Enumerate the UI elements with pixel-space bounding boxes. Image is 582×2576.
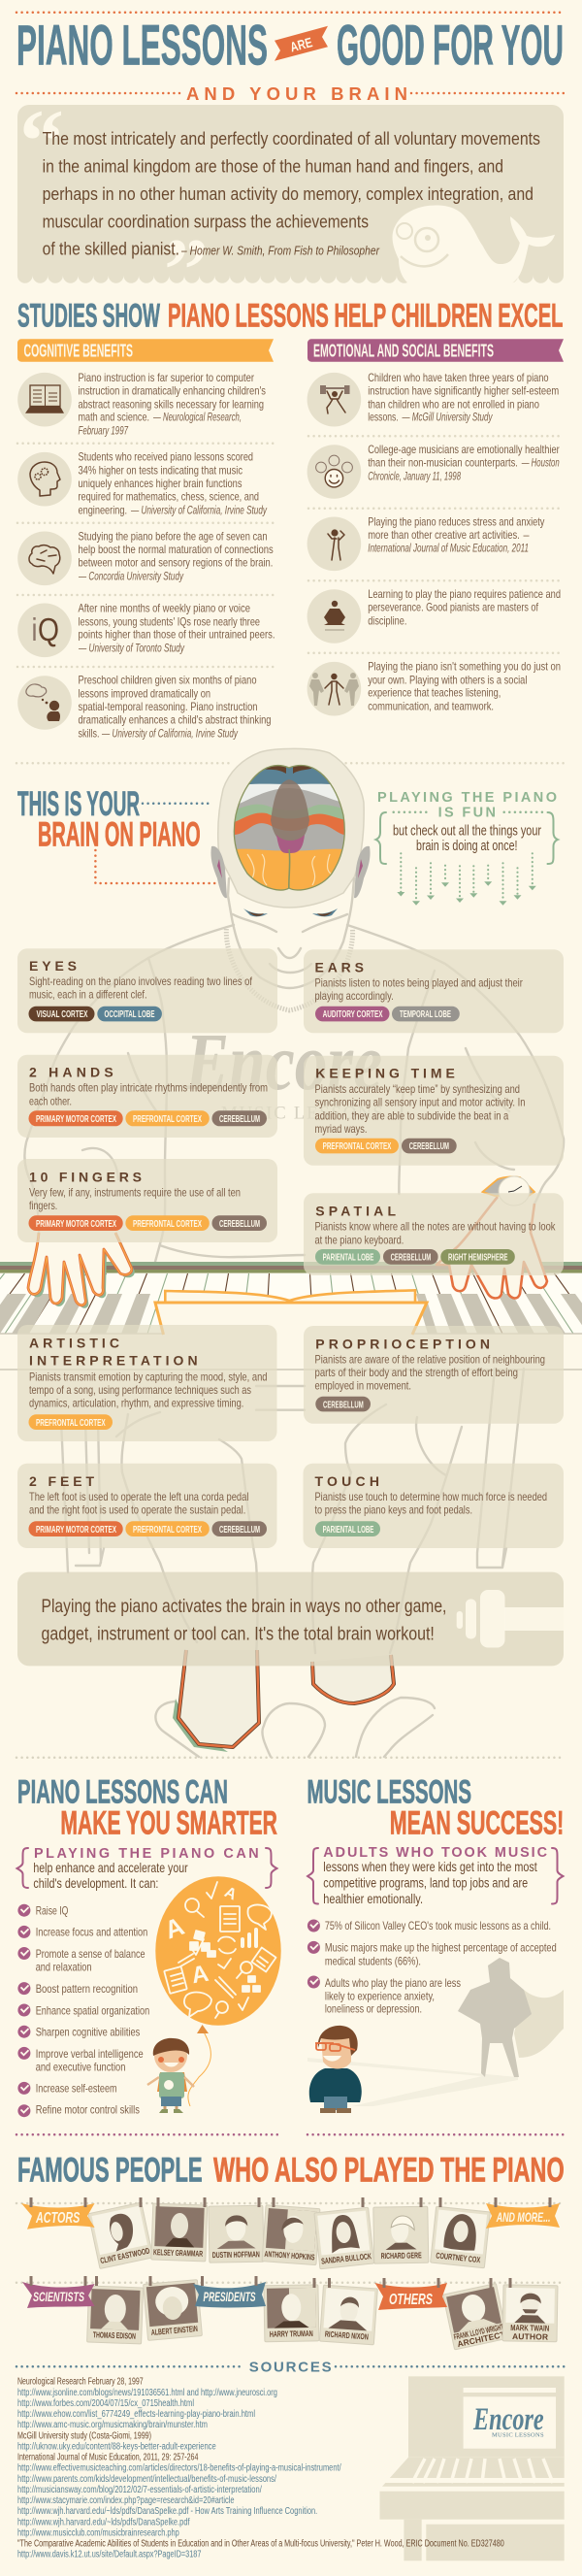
title: PIANO LESSONS [16, 15, 268, 78]
banner: presidents: PRESIDENTS [204, 2289, 256, 2304]
polaroid: richard nixon: RICHARD NIXON [325, 2328, 369, 2341]
text: cognitive 5: skills. [78, 726, 99, 740]
heading: studies show: STUDIES SHOW [17, 298, 161, 335]
polaroid: thomas edison: THOMAS EDISON [93, 2329, 136, 2341]
text: cognitive 4: — University of Toronto Study [78, 644, 185, 655]
logo: encore music lessons: MUSIC LESSONS [492, 2432, 544, 2439]
icon: laptop book [17, 373, 72, 427]
tag: prefrontal cortex [125, 1521, 210, 1536]
tag: temporal lobe: TEMPORAL LOBE [400, 1008, 451, 1020]
callout: playing the piano is fun [376, 790, 558, 906]
text: sources list: http://www.parents.com/kids/development/intellectual/benefits-of-music-lessons/ [17, 2474, 276, 2485]
icon: iQ: Q [38, 611, 59, 647]
quote marks: “ [19, 91, 64, 190]
panel: total brain workout: gadget, instrument or tool can. It's the total brain workout! [41, 1623, 435, 1644]
illustration: sheet music book [155, 1290, 427, 1335]
icon: head with gears [17, 452, 72, 507]
text: cognitive 5: spatial-temporal reasoning. Piano instruction [78, 700, 258, 713]
title: ARE [288, 34, 314, 55]
text: cognitive 2 [78, 450, 268, 516]
heading: music lessons mean success: MUSIC LESSONS [307, 1774, 471, 1811]
text: sources list: International Journal of Music Education, 2011, 29: 257-264 [17, 2453, 199, 2463]
heading: piano lessons can make you smarter [17, 1774, 277, 1841]
tag: auditory cortex [315, 1007, 390, 1021]
illustration: balloon with icons: A [189, 1961, 210, 1989]
quote text: of the skilled pianist. [43, 239, 179, 259]
panel: proprioception: employed in movement. [314, 1379, 411, 1393]
text: cognitive 2: required for mathematics, chess, science, and [78, 490, 259, 504]
text: cognitive 1: Piano instruction is far superior to computer [78, 371, 254, 384]
illustration: superhero shadow [307, 1958, 564, 2106]
checklist: piano lessons: Improve verbal intelligence [36, 2047, 144, 2061]
checklist: music lessons: medical students (66%). [325, 1954, 421, 1967]
panel: 2 hands: 2 HANDS [29, 1064, 113, 1079]
panel: 2 feet: The left foot is used to operate the left una corda pedal [29, 1490, 248, 1503]
panel: keeping time: KEEPING TIME [315, 1066, 455, 1081]
text: cognitive 5: — University of California, Irvine Study [101, 728, 239, 740]
icon: iQ [17, 604, 72, 657]
panel: eyes: Sight-reading on the piano involves reading two lines of [29, 974, 253, 988]
panel: artistic interpretation: ARTISTIC [29, 1336, 119, 1351]
tag: auditory cortex: AUDITORY CORTEX [323, 1008, 383, 1020]
heading: famous people [17, 2152, 565, 2190]
panel: 10 fingers: Very few, if any, instruments require the use of all ten [29, 1185, 241, 1199]
polaroid: courtney cox: COURTNEY COX [436, 2251, 481, 2264]
illustration: man with glasses [308, 2026, 362, 2113]
tag: cerebellum [402, 1139, 457, 1153]
text: emotional 5: experience that teaches listening, [368, 686, 501, 700]
text: sources list: http://www.stacymarie.com/index.php?page=research&id=20#article [17, 2495, 235, 2506]
text: cognitive 5: lessons improved dramatically on [78, 686, 210, 700]
text: sources list: http://www.jsonline.com/blogs/news/191036561.html and http://www.jneurosci.org [17, 2388, 277, 2398]
tag: cerebellum: CEREBELLUM [323, 1399, 364, 1410]
text: sources list: http://www.forbes.com/2004/07/15/cx_0715health.html [17, 2398, 194, 2409]
panel: spatial [304, 1193, 564, 1275]
tag: right hemisphere: RIGHT HEMISPHERE [448, 1252, 508, 1264]
panel: quote [17, 91, 564, 319]
icon: thinking child [17, 676, 72, 730]
panel: 2 feet: 2 FEET [29, 1473, 94, 1489]
tag: prefrontal cortex: PREFRONTAL CORTEX [133, 1113, 202, 1125]
polaroid: kelsey grammar: KELSEY GRAMMAR [153, 2247, 203, 2259]
panel: artistic interpretation: Pianists transmit emotion by capturing the mood, style, and [29, 1370, 268, 1383]
panel: keeping time: addition, they are able to subdivide the beat in a [314, 1108, 509, 1122]
polaroid: frank lloyd wright: ARCHITECT [456, 2329, 506, 2349]
text: emotional 2 [368, 443, 560, 483]
checklist: music lessons: Adults who play the piano are less [325, 1976, 461, 1990]
text: emotional 2: — Houston [521, 458, 560, 470]
heading: sources: SOURCES [249, 2359, 332, 2375]
banner: scientists: SCIENTISTS [33, 2289, 84, 2304]
tag: prefrontal cortex: PREFRONTAL CORTEX [323, 1140, 391, 1152]
icon: dumbbell [457, 1590, 564, 1648]
tag: occipital lobe [97, 1007, 162, 1021]
tag: cerebellum: CEREBELLUM [219, 1524, 260, 1536]
quote marks: ” [164, 220, 209, 319]
tag: pariental lobe: PARIENTAL LOBE [323, 1524, 373, 1536]
callout: playing the piano can [17, 1846, 277, 1891]
text: cognitive 4: After nine months of weekly piano or voice [78, 602, 250, 615]
banner: actors [21, 2203, 95, 2229]
text: cognitive 5: dramatically enhances a child's abstract thinking [78, 713, 272, 727]
panel: touch: to press the piano keys and foot pedals. [314, 1503, 472, 1517]
checklist: music lessons: loneliness or depression. [325, 2002, 422, 2016]
panel: keeping time: synchronizing all sensory input and motor activity. In [314, 1096, 526, 1109]
text: cognitive 1: math and science. [78, 411, 149, 424]
quote text: in the animal kingdom are those of the human hand and fingers, and [43, 156, 503, 177]
tag: visual cortex [29, 1007, 95, 1021]
illustration: pianist body outline [24, 925, 564, 1653]
callout: adults who took music: healthier emotionally. [323, 1891, 423, 1906]
heading: this is your brain on piano [17, 785, 217, 883]
text: cognitive 2: engineering. [78, 503, 127, 516]
heading: piano lessons can make you smarter: MAKE YOU SMARTER [60, 1804, 277, 1841]
text: emotional 5 [368, 660, 561, 712]
polaroid: frank lloyd wright: FRANK LLOYD WRIGHT [453, 2322, 504, 2342]
polaroid: clint eastwood: CLINT EASTWOOD [99, 2246, 150, 2265]
tag: cerebellum: CEREBELLUM [219, 1113, 260, 1125]
eyes [243, 908, 338, 916]
quote text: muscular coordination surpass the achievements [43, 211, 369, 231]
polaroid: richard gere: RICHARD GERE [381, 2250, 422, 2261]
panel: eyes: EYES [29, 958, 77, 974]
banner: others: OTHERS [389, 2292, 433, 2308]
panel: keeping time: Pianists accurately “keep time” by synthesizing and [314, 1082, 520, 1096]
polaroid: sandra bullock: SANDRA BULLOCK [321, 2251, 372, 2266]
text: emotional 2: Chronicle, January 11, 1998 [368, 472, 461, 483]
text: cognitive 1: February 1997 [78, 425, 128, 437]
icon: brain [17, 532, 72, 585]
polaroid: harry truman [264, 2285, 319, 2342]
tag: cerebellum [211, 1215, 267, 1231]
checklist: music lessons [307, 1919, 557, 2016]
text: emotional 1: — McGill University Study [402, 413, 493, 424]
polaroid: harry truman: HARRY TRUMAN [270, 2328, 313, 2339]
tag: pariental lobe [315, 1521, 380, 1536]
text: emotional 2: than their non-musician counterparts. [368, 456, 518, 470]
polaroid: mark twain [502, 2285, 558, 2342]
panel: spatial: at the piano keyboard. [314, 1233, 404, 1246]
heading: famous people: FAMOUS PEOPLE [17, 2152, 203, 2190]
banner: scientists [22, 2282, 95, 2308]
watermark: encore logo: MUSIC LESSONS [221, 1104, 383, 1124]
checklist: piano lessons: Boost pattern recognition [36, 1982, 138, 1996]
panel: touch: TOUCH [314, 1473, 379, 1489]
text: cognitive 1: abstract reasoning skills necessary for learning [78, 397, 264, 411]
illustration: boy with backpack [147, 2038, 194, 2113]
polaroid: thomas edison [87, 2286, 144, 2344]
text: cognitive 5: Preschool children given six months of piano [78, 674, 257, 687]
text: sources list: http://www.effectivemusicteaching.com/articles/directors/18-benefits-of-playing-a-musical-instrument/ [17, 2463, 341, 2474]
tag: primary motor cortex [29, 1215, 123, 1231]
panel: 10 fingers: 10 FINGERS [29, 1169, 142, 1184]
illustration: right hand and watch [436, 1176, 547, 1299]
checklist: piano lessons: Promote a sense of balance [36, 1947, 146, 1961]
illustration: shoes and pedals [155, 1650, 435, 1757]
panel: proprioception [304, 1326, 564, 1424]
polaroid: frank lloyd wright [443, 2284, 507, 2350]
logo: encore music lessons: Encore [472, 2402, 544, 2437]
callout: playing the piano can: help enhance and accelerate your [33, 1860, 188, 1875]
icon: weightlifter [307, 373, 361, 427]
callout: adults who took music: ADULTS WHO TOOK MUSIC [323, 1845, 547, 1861]
tag: prefrontal cortex [29, 1414, 113, 1430]
checklist: piano lessons: Raise IQ [36, 1904, 68, 1918]
panel: 2 hands: Both hands often play intricate rhythms independently from [29, 1081, 268, 1095]
panel: keeping time [304, 1056, 564, 1166]
icon: smileys [307, 445, 361, 499]
banner: actors: ACTORS [35, 2210, 81, 2227]
text: sources list: http://uknow.uky.edu/content/88-keys-better-adult-experience [17, 2442, 216, 2452]
text: cognitive 2: 34% higher on tests indicating that music [78, 463, 242, 477]
text: sources list [17, 2377, 504, 2560]
tag: cerebellum [383, 1249, 438, 1265]
polaroid: albert einstein [144, 2280, 202, 2340]
text: cognitive 1 [78, 371, 266, 437]
illustration: piano with encore logo [380, 2376, 565, 2560]
polaroid: dustin hoffman: DUSTIN HOFFMAN [212, 2249, 260, 2260]
ears [210, 846, 371, 898]
text: sources list: http://www.wjh.harvard.edu/~lds/pdfs/DanaSpelke.pdf [17, 2517, 190, 2527]
polaroid: sandra bullock [314, 2207, 374, 2269]
quote text [43, 128, 540, 259]
callout: playing the piano can: child's development. It can: [33, 1875, 158, 1891]
text: emotional 3 [368, 514, 544, 555]
panel: touch [303, 1464, 564, 1548]
polaroid: kelsey grammar [151, 2203, 208, 2262]
banner: others [374, 2283, 447, 2310]
text: emotional 4: discipline. [368, 613, 406, 627]
callout: playing the piano is fun: PLAYING THE PIANO [377, 790, 557, 806]
panel: 2 hands: each other. [29, 1094, 72, 1107]
panel: 2 feet [17, 1464, 277, 1548]
panel: artistic interpretation: dynamics, articulation, rhythm, and expressive timing. [29, 1397, 243, 1410]
panel: spatial: SPATIAL [315, 1204, 396, 1219]
panel: eyes [17, 948, 277, 1033]
panel: ears: playing accordingly. [314, 989, 394, 1003]
tag: prefrontal cortex: PREFRONTAL CORTEX [133, 1524, 202, 1536]
polaroid: mark twain: AUTHOR [512, 2331, 548, 2342]
tag: right hemisphere [440, 1249, 515, 1265]
panel: artistic interpretation [17, 1325, 277, 1441]
panel: artistic interpretation: INTERPRETATION [29, 1352, 198, 1368]
panel: eyes: music, each in a different clef. [29, 988, 147, 1002]
text: sources list: http://www.ehow.com/list_6774249_effects-learning-play-piano-brain.html [17, 2409, 255, 2420]
tag: cerebellum [315, 1397, 371, 1411]
text: sources list: http://www.wjh.harvard.edu/~lds/pdfs/DanaSpelke.pdf - How Arts Training Influence Cognition. [17, 2506, 317, 2517]
text: cognitive 3: help boost the normal maturation of connections [78, 543, 274, 556]
banner: and more: AND MORE... [496, 2209, 551, 2225]
text: emotional 1: than children who are not enrolled in piano [368, 397, 539, 411]
text: cognitive 4: points higher than those of their untrained peers. [78, 628, 275, 642]
banner: presidents [193, 2282, 266, 2308]
tag: occipital lobe: OCCIPITAL LOBE [105, 1008, 155, 1020]
polaroid: richard nixon [319, 2285, 377, 2345]
tag: prefrontal cortex: PREFRONTAL CORTEX [133, 1218, 202, 1230]
arrows [397, 853, 536, 906]
illustration: keyboard [0, 1262, 582, 1370]
illustration: left hand [28, 1233, 135, 1308]
icon: stretching man [307, 516, 361, 571]
banner: and more [486, 2203, 560, 2229]
text: emotional 5: communication, and teamwork. [368, 699, 494, 712]
panel: artistic interpretation: tempo of a song, using performance techniques such as [29, 1383, 251, 1397]
text: sources list: http://www.musicclub.com/musicbrainresearch.php [17, 2527, 179, 2539]
tag: primary motor cortex [29, 1110, 123, 1126]
text: cognitive 2: Students who received piano lessons scored [78, 450, 253, 464]
text: cognitive 1: instruction in dramatically enhancing children's [78, 384, 266, 398]
tag: cerebellum: CEREBELLUM [391, 1252, 431, 1264]
illustration: balloon with icons: A [222, 1884, 240, 1904]
text: emotional 1: lessons. [368, 411, 399, 424]
heading: this is your brain on piano: THIS IS YOUR [17, 785, 140, 823]
text: emotional 5: your own. Playing with others is a social [368, 673, 527, 686]
checklist: piano lessons: Sharpen cognitive abilities [36, 2025, 140, 2038]
tag: prefrontal cortex [125, 1215, 210, 1231]
tag: primary motor cortex: PRIMARY MOTOR CORTEX [36, 1218, 116, 1230]
polaroid: anthony hopkins: ANTHONY HOPKINS [264, 2249, 315, 2262]
illustration: balloon with icons [155, 1876, 281, 2106]
tag: temporal lobe [392, 1007, 460, 1021]
panel: total brain workout [17, 1572, 564, 1666]
text: cognitive 2: uniquely enhances higher brain functions [78, 477, 242, 490]
text: sources list: http://musiciansway.com/blog/2012/02/7-essentials-of-artistic-interpretation/ [17, 2485, 262, 2495]
checklist: music lessons: likely to experience anxiety, [325, 1989, 435, 2002]
whale [393, 205, 555, 283]
callout: playing the piano can: PLAYING THE PIANO CAN [34, 1846, 259, 1862]
tag: cerebellum [211, 1521, 267, 1536]
panel: 10 fingers: fingers. [29, 1199, 57, 1212]
tag: pariental lobe [315, 1249, 380, 1265]
banner: cognitive benefits [17, 339, 274, 362]
heading: music lessons mean success [307, 1774, 564, 1841]
polaroid: clint eastwood [88, 2202, 153, 2268]
tag: primary motor cortex: PRIMARY MOTOR CORTEX [36, 1113, 116, 1125]
checklist: piano lessons: and relaxation [36, 1961, 91, 1974]
callout: playing the piano is fun: IS FUN [438, 805, 496, 820]
text: cognitive 4: lessons, young students' IQs rose nearly three [78, 614, 260, 628]
panel: proprioception: PROPRIOCEPTION [315, 1336, 490, 1351]
tag: primary motor cortex [29, 1521, 123, 1536]
text: sources list: McGill University study (Costa-Giomi, 1999) [17, 2430, 151, 2441]
text: cognitive 3: between motor and sensory regions of the brain. [78, 556, 273, 570]
text: emotional 3: more than other creative art activities. [368, 528, 520, 542]
polaroid: richard gere [373, 2206, 429, 2263]
panel: 2 hands [17, 1055, 277, 1138]
panel: ears: Pianists listen to notes being played and adjust their [314, 975, 523, 989]
tag: primary motor cortex: PRIMARY MOTOR CORTEX [36, 1524, 116, 1536]
panel: keeping time: myriad ways. [314, 1122, 367, 1136]
polaroid: courtney cox [431, 2206, 490, 2268]
checklist: piano lessons: Increase self-esteem [36, 2082, 117, 2096]
panel: 2 feet: and the right foot is used to operate the sustain pedal. [29, 1503, 245, 1517]
text: sources list: http://www.davis.k12.ut.us/site/Default.aspx?PageID=3187 [17, 2550, 202, 2560]
text: cognitive 3: — Concordia University Study [78, 571, 184, 582]
checklist: piano lessons: Increase focus and attention [36, 1926, 147, 1939]
tag: cerebellum [211, 1110, 267, 1126]
quote text: – Homer W. Smith, From Fish to Philosopher [180, 244, 380, 258]
tag: prefrontal cortex [315, 1139, 399, 1153]
tag: cerebellum: CEREBELLUM [219, 1218, 260, 1230]
tag: pariental lobe: PARIENTAL LOBE [323, 1252, 373, 1264]
heading: this is your brain on piano: BRAIN ON PIANO [38, 816, 201, 854]
polaroid: anthony hopkins [262, 2205, 320, 2265]
heading: piano lessons can make you smarter: PIANO LESSONS CAN [17, 1774, 228, 1811]
polaroid: albert einstein: ALBERT EINSTEIN [150, 2324, 198, 2337]
text: sources list: http://www.amc-music.org/musicmaking/brain/munster.htm [17, 2420, 208, 2430]
checklist: piano lessons: Enhance spatial organization [36, 2003, 149, 2017]
icon: iQ: i [31, 611, 37, 647]
checklist: piano lessons: and executive function [36, 2061, 125, 2074]
panel: ears [304, 949, 564, 1033]
panel: proprioception: parts of their body and the strength of effort being [314, 1366, 518, 1379]
quote marks [19, 91, 209, 319]
text: cognitive 5 [78, 674, 272, 740]
tag: prefrontal cortex [125, 1110, 210, 1126]
text: cognitive 1: — Neurological Research, [152, 413, 242, 424]
watermark: encore logo: Encore [184, 1017, 382, 1107]
polaroid: mark twain: MARK TWAIN [510, 2323, 549, 2333]
text: cognitive 2: — University of California, Irvine Study [130, 505, 268, 516]
text: cognitive 4 [78, 602, 275, 655]
text: emotional 1 [368, 371, 559, 424]
subtitle: AND YOUR BRAIN [186, 83, 407, 104]
checklist: piano lessons: Refine motor control skills [36, 2102, 140, 2116]
callout: adults who took music [307, 1845, 563, 1906]
checklist: piano lessons [17, 1904, 149, 2117]
tag: prefrontal cortex: PREFRONTAL CORTEX [36, 1417, 106, 1429]
text: cognitive 3: Studying the piano before the age of seven can [78, 529, 268, 543]
illustration: brain map [233, 765, 345, 891]
panel: total brain workout: Playing the piano activates the brain in ways no other game, [41, 1596, 446, 1617]
tag: cerebellum: CEREBELLUM [409, 1140, 449, 1152]
icon: meditating figure [307, 589, 361, 644]
panel: ears: EARS [314, 959, 364, 974]
illustration: head and hair [210, 748, 371, 1010]
text: emotional 3: — [524, 528, 530, 542]
callout: playing the piano is fun: brain is doing at once! [416, 839, 518, 854]
banner: cognitive benefits: COGNITIVE BENEFITS [23, 341, 133, 361]
callout: adults who took music: competitive programs, land top jobs and are [323, 1875, 528, 1891]
icon: group of people [307, 662, 361, 716]
text: emotional 4 [368, 587, 561, 627]
tag: visual cortex: VISUAL CORTEX [37, 1008, 87, 1020]
illustration: balloon with icons: A [161, 1911, 188, 1944]
polaroid: dustin hoffman [209, 2205, 264, 2262]
text: sources list: Neurological Research February 28, 1997 [17, 2377, 144, 2388]
panel: 10 fingers [17, 1159, 277, 1242]
text: cognitive 3 [78, 529, 274, 582]
